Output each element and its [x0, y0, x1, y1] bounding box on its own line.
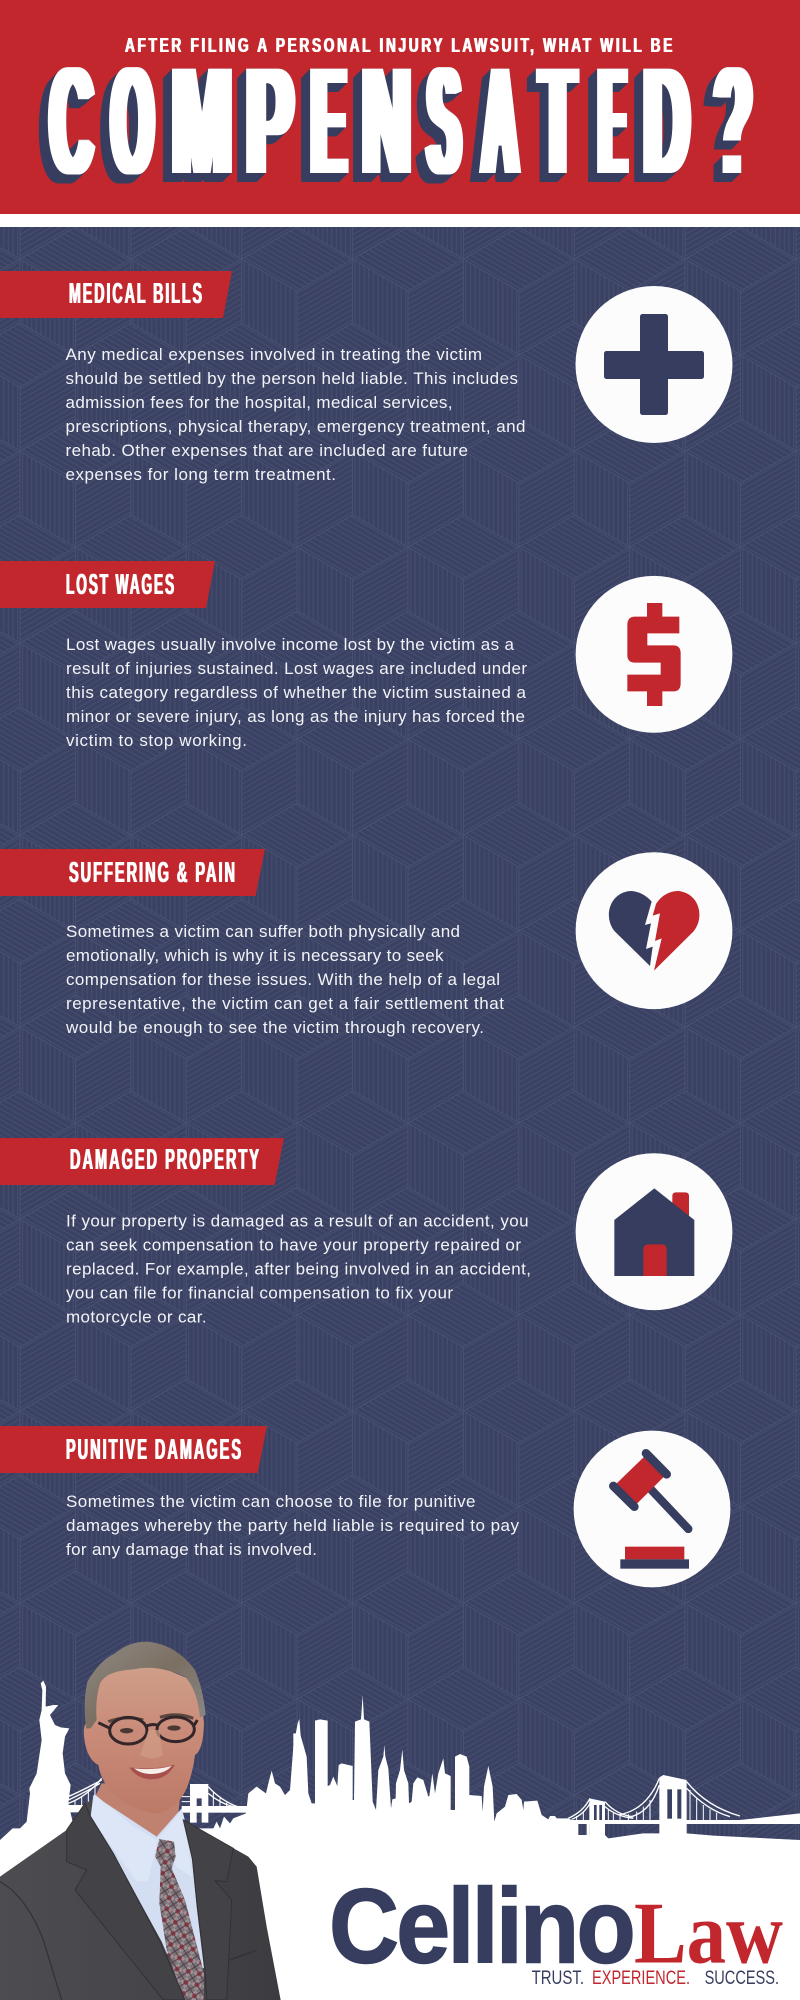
- icon: dollar sign: [576, 576, 732, 733]
- statue of liberty and left skyline: [0, 1681, 301, 2000]
- text block: medical bills: Any medical expenses involved in treating the victim: [66, 345, 482, 364]
- portrait of attorney: [0, 1642, 281, 2000]
- text block: medical bills: expenses for long term treatment.: [66, 465, 336, 484]
- heading ribbon: lost wages: LOST WAGES: [66, 569, 176, 601]
- nose: [140, 1730, 163, 1758]
- header title: compensated: P: [246, 34, 293, 208]
- text block: lost wages: victim to stop working.: [66, 731, 247, 750]
- heading ribbon: lost wages: [0, 561, 215, 608]
- text block: damaged property: you can file for financial compensation to fix your: [66, 1284, 453, 1303]
- panel: punitive damages: [0, 1426, 730, 1587]
- header title: compensated: D: [644, 34, 689, 209]
- midtown skyline and right shoreline: [293, 1695, 800, 2000]
- necktie: [155, 1839, 204, 2000]
- header title: compensated: T: [540, 34, 575, 208]
- text block: punitive damages: damages whereby the party held liable is required to pay: [66, 1516, 520, 1535]
- wordmark Law: Law: [634, 1886, 783, 1982]
- header title: compensated: S: [428, 34, 460, 208]
- header banner: [0, 0, 800, 214]
- icon: gavel: [574, 1431, 730, 1587]
- icon: medical cross: [576, 286, 732, 443]
- header title: compensated: A: [482, 33, 518, 208]
- heading ribbon: suffering and pain: [0, 849, 265, 896]
- text block: punitive damages: [66, 1492, 520, 1559]
- tagline: SUCCESS.: [705, 1968, 779, 1989]
- header title: compensated: N: [363, 34, 411, 208]
- text block: damaged property: If your property is damaged as a result of an accident, you: [66, 1212, 529, 1231]
- brooklyn and manhattan bridges: [568, 1775, 800, 1837]
- collar: [91, 1794, 192, 1882]
- text block: lost wages: [66, 635, 527, 750]
- panel: suffering and pain: [0, 849, 732, 1037]
- header title: compensated: [50, 33, 752, 209]
- neck: [95, 1783, 182, 1840]
- text block: damaged property: can seek compensation to have your property repaired or: [66, 1236, 521, 1255]
- left bridge: [68, 1778, 248, 1823]
- logo: Cellino Law: [329, 1868, 783, 1989]
- heading ribbon: punitive damages: [0, 1426, 267, 1473]
- text block: suffering and pain: [65, 922, 504, 1037]
- text block: medical bills: should be settled by the person held liable. This includes: [66, 369, 518, 388]
- text block: punitive damages: Sometimes the victim can choose to file for punitive: [66, 1492, 476, 1511]
- glasses: [98, 1717, 197, 1744]
- icon: broken heart: [576, 852, 732, 1009]
- text block: medical bills: prescriptions, physical therapy, emergency treatment, and: [66, 417, 526, 436]
- skyline silhouette: [0, 1681, 800, 2000]
- panel: medical bills: [0, 271, 732, 484]
- header title: compensated: E: [600, 35, 626, 209]
- heading ribbon: medical bills: MEDICAL BILLS: [69, 278, 204, 310]
- header title: compensated: E: [312, 33, 346, 208]
- text block: lost wages: minor or severe injury, as long as the injury has forced the: [66, 707, 525, 726]
- header title: compensated: M: [172, 33, 232, 208]
- text block: damaged property: motorcycle or car.: [66, 1308, 207, 1327]
- eyes: [120, 1725, 181, 1733]
- text block: punitive damages: for any damage that is involved.: [66, 1540, 317, 1559]
- tagline: [532, 1968, 779, 1989]
- lapels: [67, 1803, 233, 2000]
- icon: house: [576, 1153, 732, 1310]
- eyebrows: [108, 1715, 193, 1722]
- text block: lost wages: this category regardless of whether the victim sustained a: [66, 683, 527, 702]
- text block: suffering and pain: representative, the victim can get a fair settlement that: [66, 994, 504, 1013]
- text block: damaged property: [66, 1212, 531, 1327]
- wordmark Cellino: Cellino: [329, 1868, 633, 1986]
- face: [84, 1660, 204, 1813]
- shirt: [91, 1795, 204, 1968]
- text block: damaged property: replaced. For example, after being involved in an accident,: [66, 1260, 531, 1279]
- text block: suffering and pain: emotionally, which is why it is necessary to seek: [66, 946, 444, 965]
- panel: damaged property: [0, 1138, 732, 1327]
- tagline: EXPERIENCE.: [592, 1968, 690, 1989]
- smile: [129, 1765, 175, 1779]
- hair: [85, 1642, 206, 1728]
- heading ribbon: medical bills: [0, 271, 232, 318]
- heading ribbon: damaged property: DAMAGED PROPERTY: [70, 1144, 261, 1176]
- header title: compensated: C: [50, 33, 93, 208]
- header title: compensated: ?: [714, 35, 752, 209]
- text block: medical bills: [66, 345, 526, 484]
- header title: compensated: O: [112, 34, 153, 208]
- panel: lost wages: [0, 561, 732, 750]
- text block: suffering and pain: would be enough to see the victim through recovery.: [65, 1018, 484, 1037]
- text block: suffering and pain: Sometimes a victim can suffer both physically and: [66, 922, 460, 941]
- suit jacket: [0, 1800, 281, 2000]
- tagline: TRUST.: [532, 1968, 584, 1989]
- text block: medical bills: admission fees for the hospital, medical services,: [66, 393, 452, 412]
- heading ribbon: suffering and pain: SUFFERING & PAIN: [69, 857, 237, 889]
- heading ribbon: damaged property: [0, 1138, 284, 1185]
- text block: suffering and pain: compensation for these issues. With the help of a legal: [66, 970, 500, 989]
- text block: lost wages: Lost wages usually involve income lost by the victim as a: [66, 635, 515, 654]
- heading ribbon: punitive damages: PUNITIVE DAMAGES: [66, 1434, 243, 1466]
- text block: lost wages: result of injuries sustained. Lost wages are included under: [66, 659, 527, 678]
- text block: medical bills: rehab. Other expenses that are included are future: [66, 441, 468, 460]
